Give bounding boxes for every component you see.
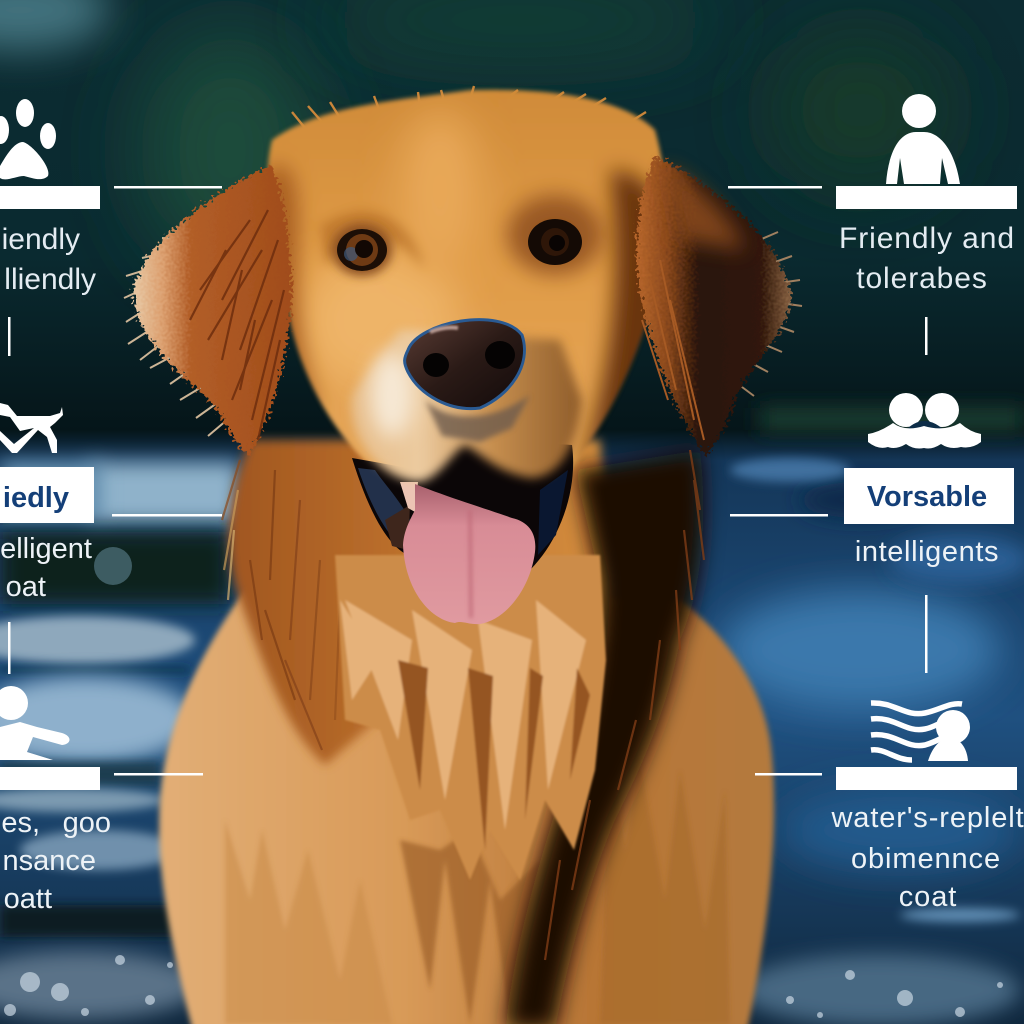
divider (925, 317, 928, 355)
banner text: Vorsable (867, 481, 987, 513)
icon: wind and head (871, 703, 970, 761)
panel: mid left trait (0, 403, 222, 603)
connector (730, 514, 828, 516)
connector (728, 186, 822, 188)
dog illustration (124, 80, 802, 1024)
label: oatt (4, 883, 52, 915)
icon: person (886, 94, 960, 184)
banner (0, 767, 100, 790)
dog body (159, 590, 774, 1024)
connector (114, 773, 203, 776)
left eye (332, 224, 392, 276)
divider (925, 595, 928, 673)
banner (836, 186, 1017, 209)
panel: bottom left trait (0, 686, 203, 915)
left ear (124, 165, 292, 456)
label: Friendly and (839, 222, 1015, 255)
panel: mid right trait (730, 393, 1014, 673)
label: obimennce (851, 843, 1001, 875)
neck hair strands (222, 460, 340, 750)
connector (755, 773, 822, 776)
banner (0, 186, 100, 209)
brow shading (320, 211, 425, 270)
label: iendly (2, 223, 80, 256)
banner (836, 767, 1017, 790)
banner (0, 467, 94, 523)
rust fringe on right neck (545, 450, 704, 960)
head crest hairs (292, 86, 646, 128)
icon: paw (0, 99, 56, 179)
left vertical dividers (8, 317, 10, 674)
connector (114, 186, 222, 188)
banner (844, 468, 1014, 524)
mouth (352, 430, 573, 570)
icon: dog (0, 403, 63, 453)
dark right neck shadow (505, 450, 703, 1024)
panel: top right trait (728, 94, 1017, 355)
label: coat (899, 881, 957, 913)
head (264, 86, 666, 468)
label: nsance (2, 845, 96, 877)
panel: bottom right trait (755, 703, 1024, 913)
left ear fringe (124, 238, 234, 436)
label: lliendly (4, 263, 96, 296)
right eye (528, 219, 582, 265)
chest fur (335, 555, 606, 880)
banner text: iedly (3, 482, 69, 514)
right face shadow (572, 159, 652, 464)
icon: waves and circles (868, 393, 981, 448)
label: oat (6, 571, 46, 603)
muzzle (351, 330, 582, 482)
nose (405, 320, 524, 409)
label: es, (1, 807, 40, 839)
panel: top left trait (0, 99, 222, 296)
label: intelligents (855, 536, 999, 568)
lower wet fur strands (225, 740, 730, 1024)
label: tolerabes (856, 262, 988, 295)
label: elligent (0, 533, 92, 565)
right ear (636, 155, 802, 455)
label: goo (63, 807, 111, 839)
icon: swimmer (0, 686, 70, 760)
label: water's-replelt (830, 802, 1024, 834)
tongue (403, 484, 535, 624)
neck fur (229, 440, 620, 765)
right ear fringe (730, 232, 802, 396)
connector (112, 514, 222, 516)
